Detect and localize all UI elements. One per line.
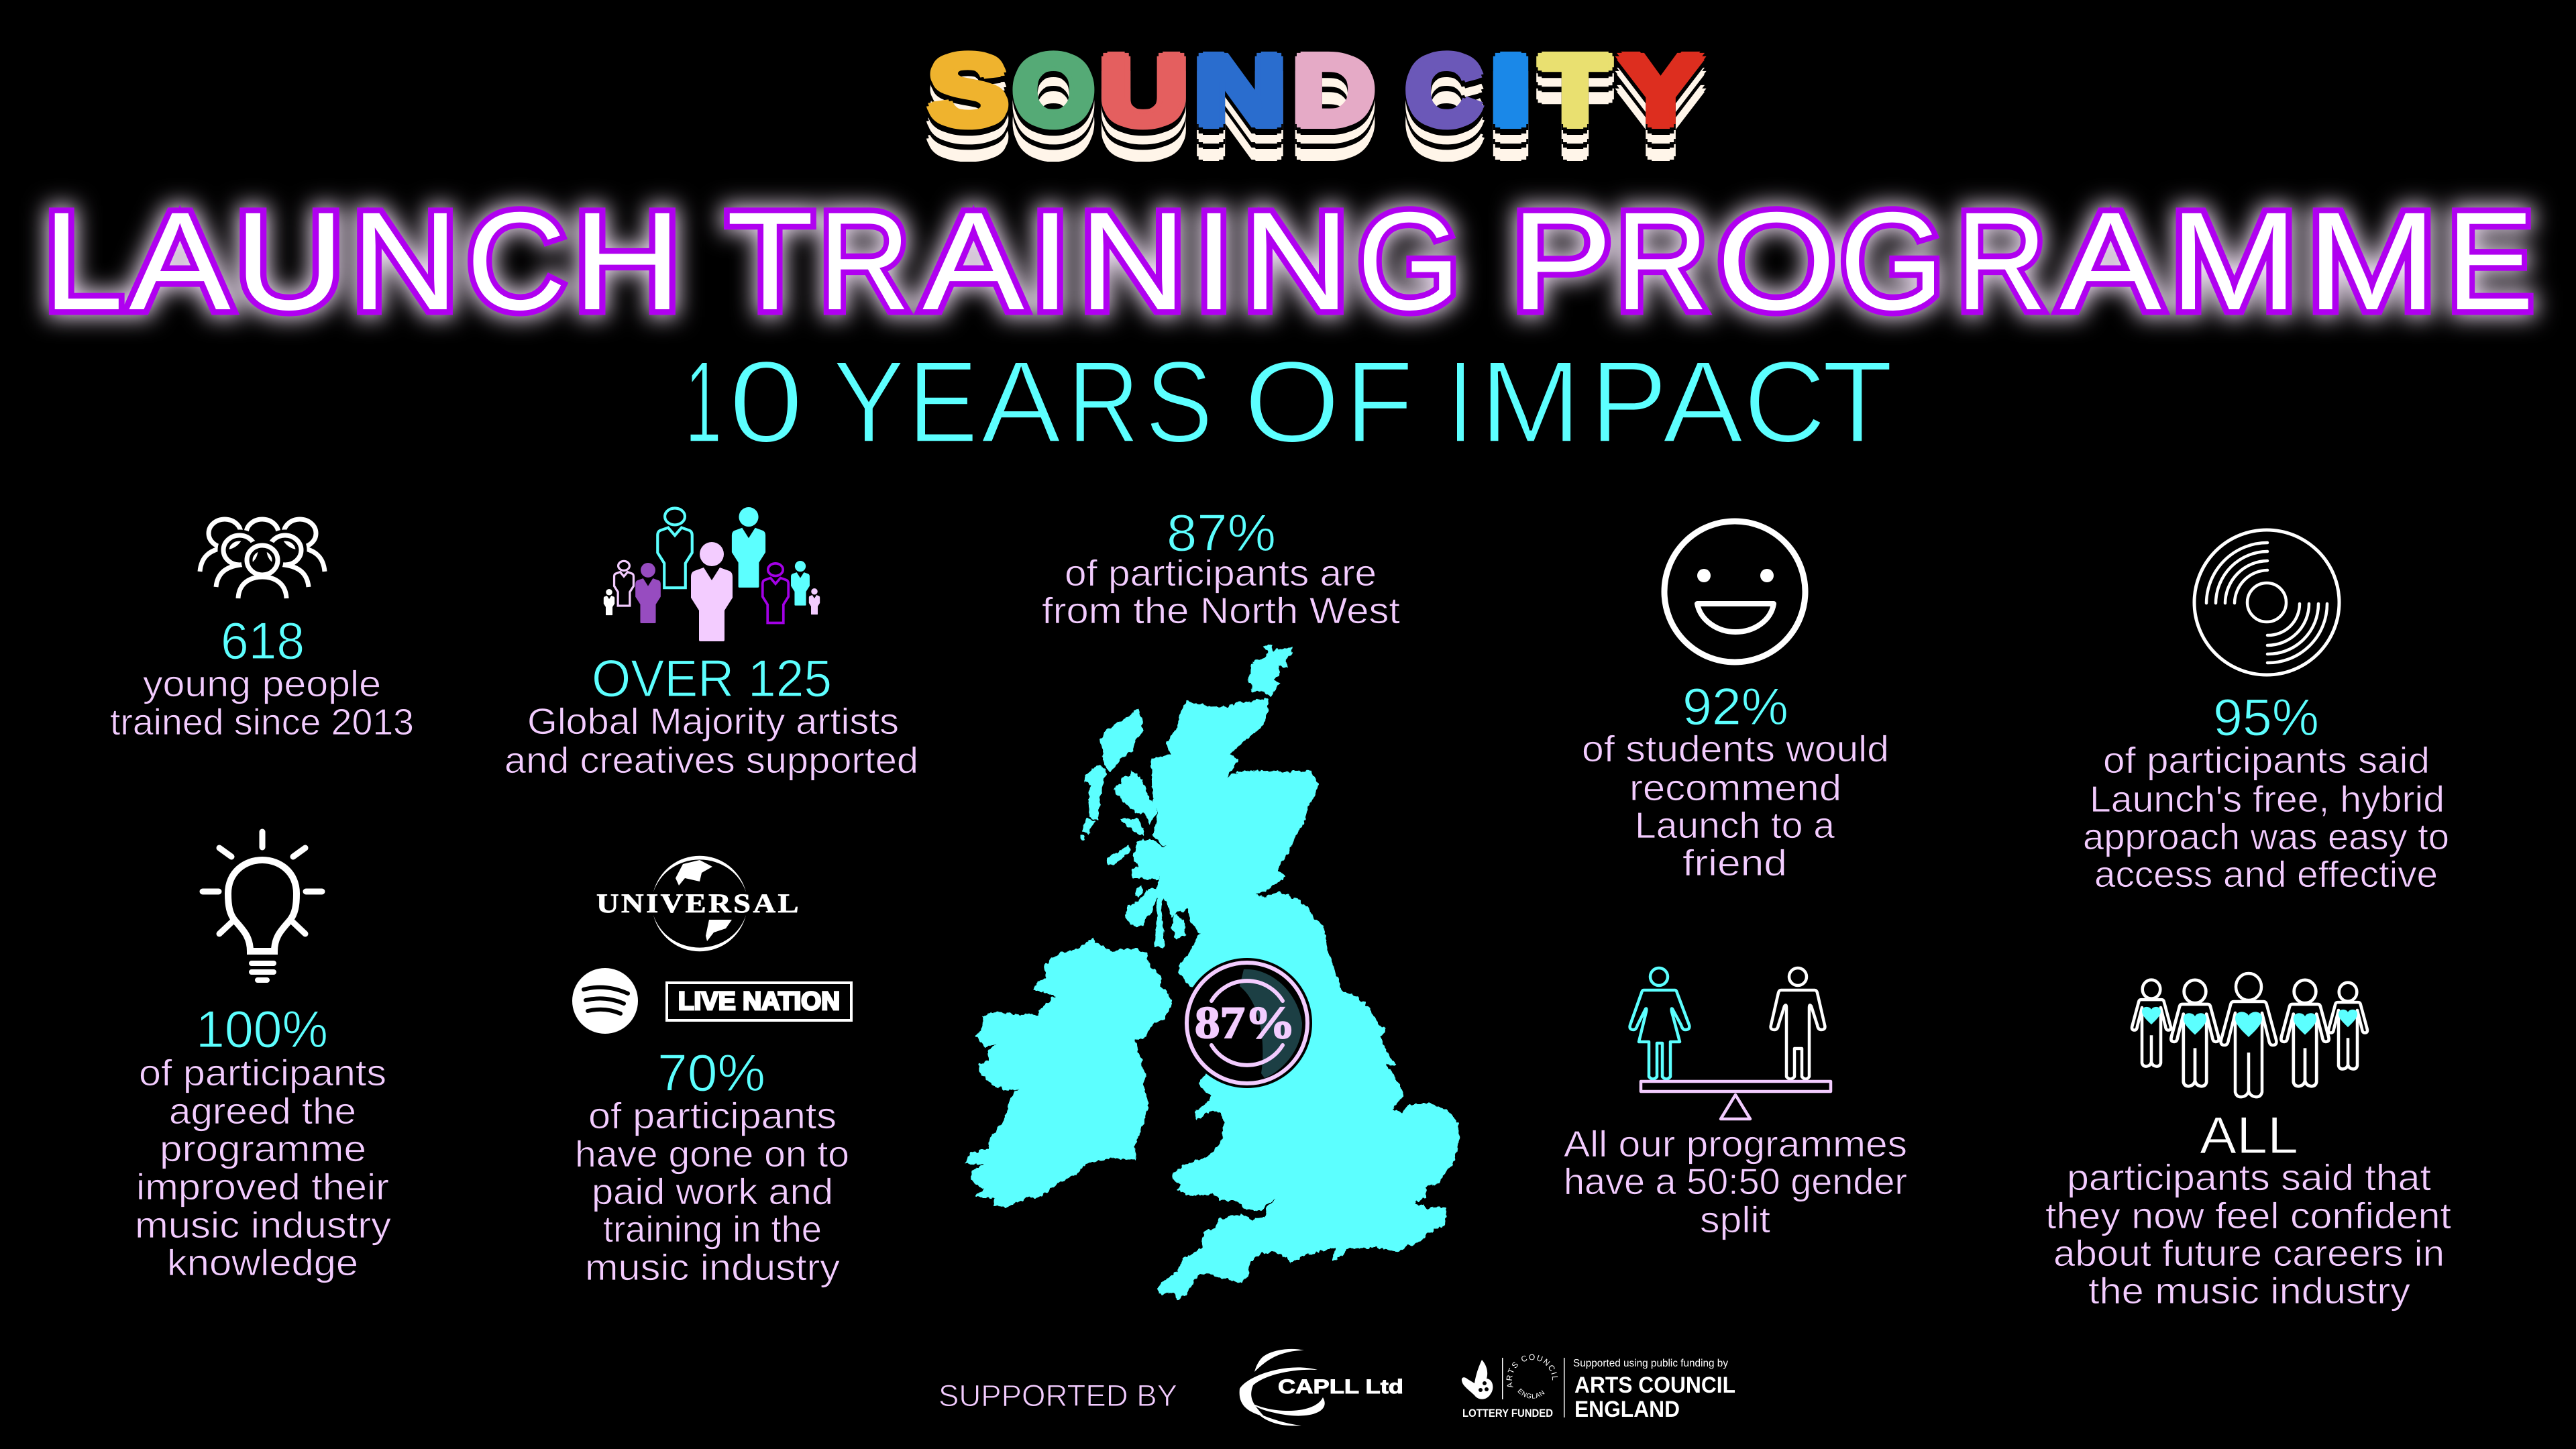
text: participants knowledge: knowledge xyxy=(167,1242,358,1283)
text: paid work: music industry xyxy=(585,1246,841,1288)
text: recommend: friend xyxy=(1682,842,1787,883)
map: British Isles xyxy=(965,645,1459,1300)
footer: supporters xyxy=(938,1348,1735,1426)
text: participants knowledge: music industry xyxy=(135,1204,392,1246)
logo: Sound City: Y xyxy=(1619,36,1703,146)
title: Launch Training Programme: M xyxy=(2169,184,2298,339)
title: Launch Training Programme: N xyxy=(1079,184,1187,339)
subtitle: 10 years of impact: P xyxy=(1590,336,1668,467)
panel: 95% vinyl xyxy=(2083,530,2449,895)
logo: Sound City: T xyxy=(1540,36,1610,146)
subtitle: 10 years of impact: 0 xyxy=(729,336,804,467)
stat: 100%: 100% xyxy=(196,1000,328,1059)
logo: Sound City: O xyxy=(1013,36,1094,146)
icon: balance scale xyxy=(1630,968,1831,1119)
logo: Live Nation: LIVE NATION xyxy=(678,987,840,1016)
title: Launch Training Programme: R xyxy=(818,184,910,339)
subtitle: 10 years of impact xyxy=(685,336,1893,467)
title: Launch Training Programme xyxy=(43,184,2534,339)
logo: Arts Council England xyxy=(1461,1354,1735,1422)
title: Launch Training Programme: L xyxy=(43,184,123,339)
logo: Sound City: N xyxy=(1195,36,1285,146)
stat: 95%: 95% xyxy=(2213,688,2319,747)
subtitle: 10 years of impact: Y xyxy=(833,336,905,467)
logo: Sound City: S xyxy=(928,36,1008,146)
stat: 92%: 92% xyxy=(1682,677,1788,736)
stat: 70%: 70% xyxy=(657,1043,765,1102)
text: young people trained since 2013: young people xyxy=(143,663,381,704)
logo: Sound City: U xyxy=(1100,36,1187,146)
text: global majority: and creatives supported xyxy=(504,739,918,781)
title: Launch Training Programme: I xyxy=(1030,184,1071,339)
text: paid work: have gone on to xyxy=(575,1133,849,1175)
title: Launch Training Programme: E xyxy=(2447,184,2534,339)
title: Launch Training Programme: G xyxy=(1839,184,1944,339)
logo: Arts Council England: Supported using public funding by xyxy=(1573,1358,1728,1369)
text: participants knowledge xyxy=(135,1052,392,1283)
title: Launch Training Programme: O xyxy=(1717,184,1836,339)
text: from the north west xyxy=(1042,552,1400,631)
logo: Sound City: C xyxy=(1406,36,1483,146)
text: hybrid approach: of participants said xyxy=(2103,739,2430,781)
text: hybrid approach: Launch's free, hybrid xyxy=(2090,778,2445,820)
stat: 618: 618 xyxy=(221,611,305,670)
text: hybrid approach: approach was easy to xyxy=(2083,816,2449,857)
logo: Live Nation xyxy=(667,983,851,1020)
panel: UK map 87% north west xyxy=(965,503,1459,1300)
text: 50:50 gender split xyxy=(1564,1123,1907,1240)
text: hybrid approach: access and effective xyxy=(2094,853,2438,895)
title: Launch Training Programme: P xyxy=(1511,184,1613,339)
logo: Universal xyxy=(596,856,801,951)
title: Launch Training Programme: R xyxy=(1956,184,2047,339)
logo: CAPLL: CAPLL Ltd xyxy=(1278,1376,1403,1398)
text: 50:50 gender split: split xyxy=(1700,1199,1770,1240)
logo: CAPLL xyxy=(1240,1349,1403,1426)
stat: all: ALL xyxy=(2200,1106,2298,1165)
icon: lightbulb xyxy=(203,832,322,980)
text: confident careers: participants said that xyxy=(2067,1157,2431,1198)
logo: Arts Council England: ENGLAND xyxy=(1574,1397,1680,1422)
title: Launch Training Programme: I xyxy=(1194,184,1234,339)
icon: group of people xyxy=(200,519,325,598)
title: Launch Training Programme: N xyxy=(351,184,459,339)
text: paid work: paid work and xyxy=(592,1171,833,1212)
subtitle: 10 years of impact: I xyxy=(1448,336,1473,467)
text: young people trained since 2013: trained since 2013 xyxy=(110,701,414,743)
text: recommend: of students would xyxy=(1582,728,1889,769)
text: participants knowledge: agreed the xyxy=(169,1090,356,1132)
text: young people trained since 2013 xyxy=(110,663,414,743)
text: confident careers: they now feel confident xyxy=(2045,1195,2451,1236)
logo: Arts Council England: LOTTERY FUNDED xyxy=(1462,1407,1553,1419)
logo: Arts Council England: ARTS COUNCIL xyxy=(1574,1373,1735,1398)
text: confident careers xyxy=(2045,1157,2451,1311)
text: participants knowledge: programme xyxy=(160,1128,366,1169)
icon: smiley xyxy=(1664,521,1805,662)
text: supported by: SUPPORTED BY xyxy=(938,1379,1177,1413)
logo: Spotify xyxy=(572,968,638,1034)
logo: Universal: UNIVERSAL xyxy=(596,888,801,918)
title: Launch Training Programme: M xyxy=(2306,184,2437,339)
text: 50:50 gender split: have a 50:50 gender xyxy=(1564,1161,1907,1202)
text: participants knowledge: improved their xyxy=(136,1166,389,1208)
title: Launch Training Programme: N xyxy=(1242,184,1350,339)
logo: Arts Council England: ENGLAND xyxy=(1517,1389,1544,1399)
text: confident careers: the music industry xyxy=(2088,1270,2411,1311)
logo: Sound City: I xyxy=(1491,36,1531,146)
icon: diverse people xyxy=(604,507,820,641)
text: from the north west: of participants are xyxy=(1065,552,1377,594)
text: recommend: Launch to a xyxy=(1635,804,1835,846)
subtitle: 10 years of impact: O xyxy=(1244,336,1340,467)
subtitle: 10 years of impact: M xyxy=(1479,336,1582,467)
panel: 100% knowledge xyxy=(135,832,392,1283)
icon: people with hearts xyxy=(2132,973,2367,1097)
icon: vinyl disc xyxy=(2194,530,2339,675)
panel: over 125 artists xyxy=(504,507,918,781)
text: paid work xyxy=(575,1095,849,1288)
stat: 87%: 87% xyxy=(1167,503,1276,562)
text: participants knowledge: of participants xyxy=(139,1052,386,1093)
title: Launch Training Programme: A xyxy=(129,184,231,339)
text: from the north west: from the North West xyxy=(1042,590,1400,631)
subtitle: 10 years of impact: E xyxy=(908,336,978,467)
title: Launch Training Programme: A xyxy=(2059,184,2161,339)
title: Launch Training Programme: R xyxy=(1615,184,1709,339)
badge: 87% xyxy=(1182,958,1312,1088)
stat: over 125: OVER 125 xyxy=(592,649,832,708)
text: recommend: recommend xyxy=(1629,767,1841,808)
subtitle: 10 years of impact: 1 xyxy=(685,336,722,467)
title: Launch Training Programme: H xyxy=(573,184,682,339)
text: recommend xyxy=(1582,728,1889,883)
title: Launch Training Programme: T xyxy=(727,184,814,339)
logo: Sound City: D xyxy=(1293,36,1375,146)
text: global majority xyxy=(504,700,918,781)
title: Launch Training Programme: U xyxy=(234,184,345,339)
logo: Arts Council England: ARTS COUNCIL xyxy=(1507,1354,1558,1387)
subtitle: 10 years of impact: A xyxy=(1662,336,1743,467)
text: 50:50 gender split: All our programmes xyxy=(1564,1123,1907,1165)
panel: all participants confident xyxy=(2045,973,2451,1311)
subtitle: 10 years of impact: T xyxy=(1822,336,1893,467)
subtitle: 10 years of impact: A xyxy=(981,336,1061,467)
text: paid work: of participants xyxy=(588,1095,837,1136)
text: paid work: training in the xyxy=(603,1208,822,1250)
logo: Sound City xyxy=(926,36,1707,162)
panel: 618 young people xyxy=(110,519,414,743)
panel: gender split xyxy=(1564,968,1907,1240)
subtitle: 10 years of impact: C xyxy=(1743,336,1826,467)
badge: 87%: 87% xyxy=(1195,997,1295,1048)
panel: 92% recommend xyxy=(1582,521,1889,883)
text: hybrid approach xyxy=(2083,739,2449,895)
text: global majority: Global Majority artists xyxy=(527,700,899,742)
subtitle: 10 years of impact: R xyxy=(1067,336,1140,467)
subtitle: 10 years of impact: S xyxy=(1145,336,1213,467)
panel: 70% paid work xyxy=(572,856,851,1288)
subtitle: 10 years of impact: F xyxy=(1345,336,1413,467)
title: Launch Training Programme: A xyxy=(922,184,1024,339)
text: confident careers: about future careers in xyxy=(2053,1232,2445,1274)
title: Launch Training Programme: C xyxy=(466,184,566,339)
title: Launch Training Programme: G xyxy=(1357,184,1460,339)
